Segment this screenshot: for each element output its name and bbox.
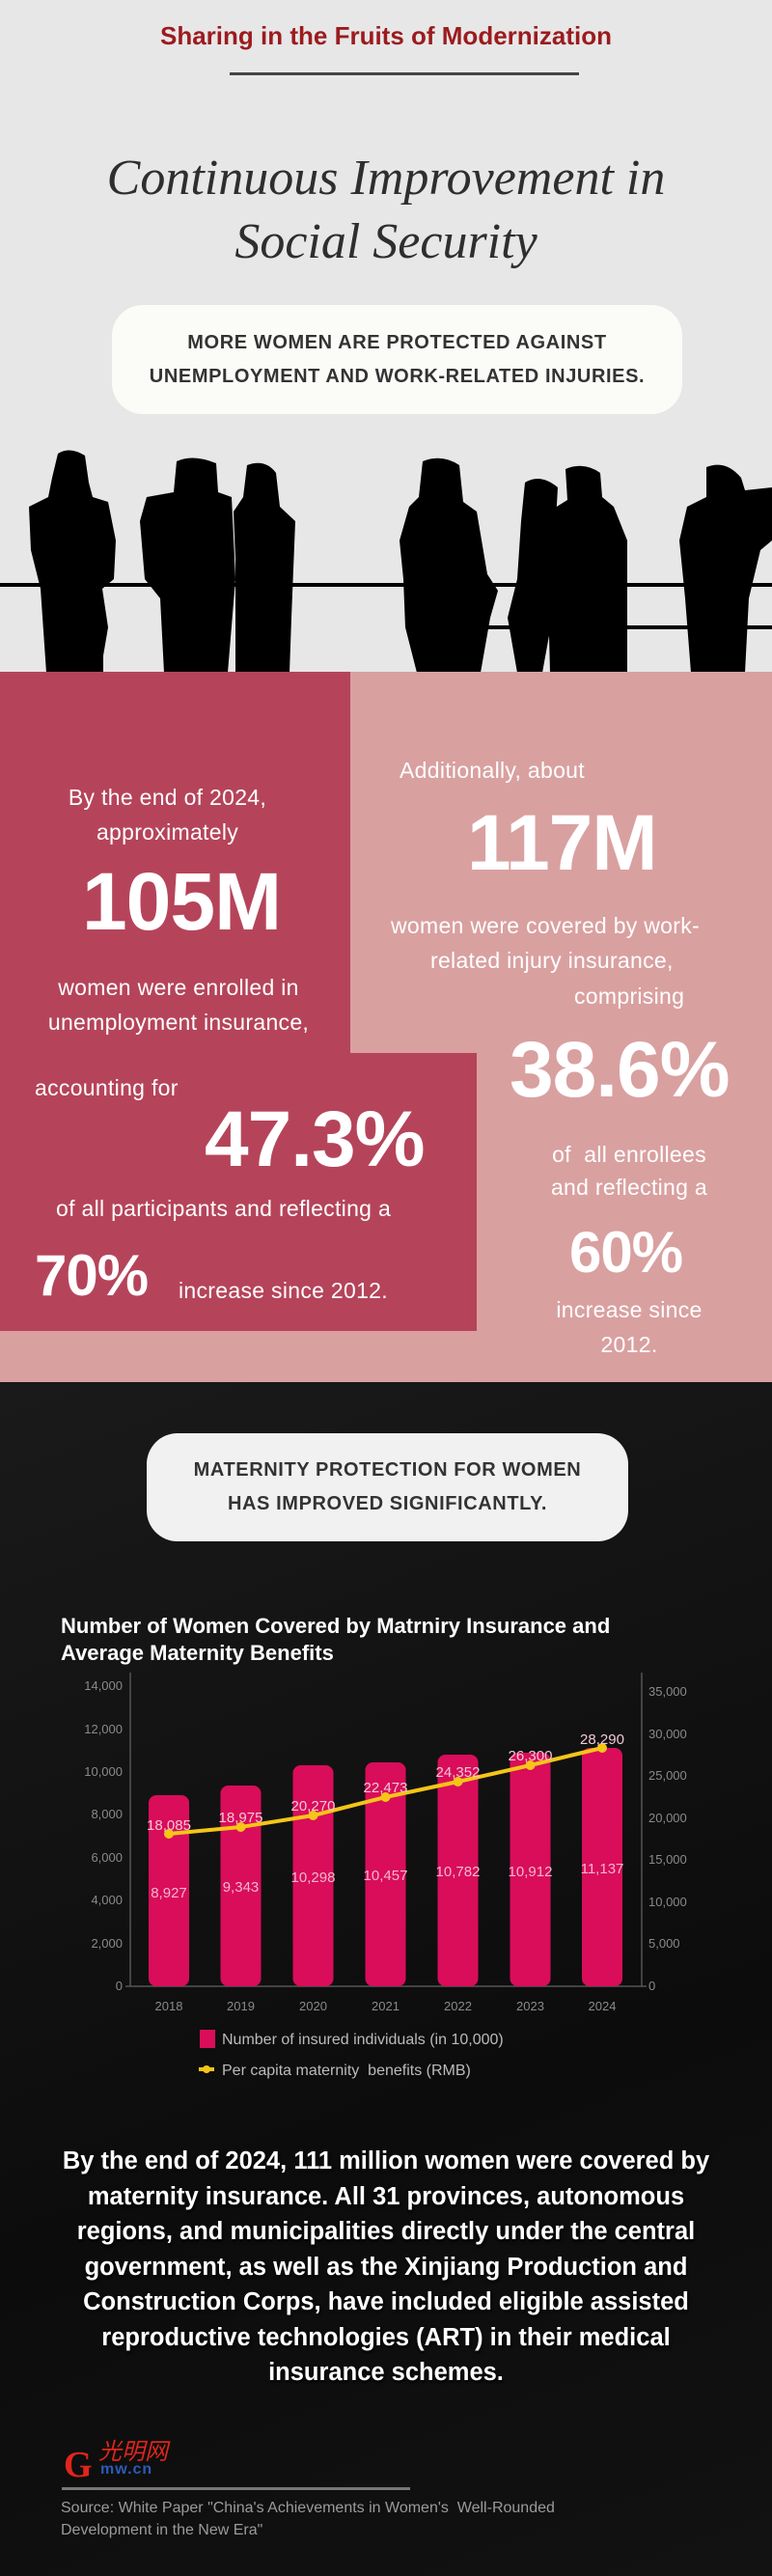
- panel: social insurance stats: 2012.: [600, 1332, 658, 1357]
- left axis: 12,000: [84, 1722, 123, 1736]
- x axis labels: 2022: [444, 1999, 472, 2013]
- panel: social insurance stats: increase since 2012.: [179, 1278, 388, 1303]
- right axis: 15,000: [648, 1852, 687, 1867]
- text: unemployment: By the end of 2024,: [69, 785, 266, 810]
- summary text: insurance schemes.: [268, 2359, 504, 2386]
- bar and line chart: [84, 1673, 687, 2079]
- main heading: Social Security: [234, 214, 538, 269]
- bar values: 10,298: [291, 1870, 335, 1886]
- chart title: Average Maternity Benefits: [61, 1641, 334, 1665]
- right axis: 10,000: [648, 1895, 687, 1909]
- text: work-related injury insurance: Additionally, about: [400, 758, 585, 783]
- line: per capita benefits: [169, 1748, 602, 1834]
- stat: 38.6%: 38.6%: [510, 1026, 730, 1114]
- x axis labels: 2020: [299, 1999, 327, 2013]
- line values: 18,975: [219, 1810, 262, 1826]
- panel: social insurance stats: unemployment insurance,: [48, 1010, 309, 1035]
- left axis: [84, 1678, 123, 1993]
- dark maternity section: [0, 1382, 772, 2576]
- stat: 70%: 70%: [35, 1243, 148, 1308]
- panel: social insurance stats: comprising: [574, 983, 684, 1009]
- summary text: regions, and municipalities directly under the central: [77, 2218, 695, 2245]
- text: unemployment: approximately: [96, 819, 238, 845]
- bar values: 10,782: [436, 1864, 480, 1880]
- line values: 18,085: [147, 1817, 191, 1834]
- line values: 20,270: [291, 1798, 335, 1814]
- panel: social insurance stats: related injury insurance,: [430, 948, 674, 973]
- right axis: 35,000: [648, 1684, 687, 1699]
- left axis: 6,000: [91, 1850, 123, 1865]
- legend: Per capita maternity benefits (RMB): [222, 2063, 471, 2079]
- bars: [149, 1748, 622, 1986]
- main heading: Continuous Improvement in: [107, 151, 665, 206]
- stat: 47.3%: 47.3%: [205, 1095, 425, 1183]
- left axis: 8,000: [91, 1807, 123, 1821]
- bar values: 11,137: [581, 1861, 623, 1877]
- summary text: reproductive technologies (ART) in their medical: [101, 2324, 671, 2351]
- line values: 22,473: [364, 1780, 407, 1796]
- logo: gmw.cn: [64, 2439, 171, 2485]
- right axis: 20,000: [648, 1811, 687, 1825]
- right axis: 30,000: [648, 1727, 687, 1741]
- x axis labels: [155, 1999, 616, 2013]
- chart title: [61, 1614, 610, 1665]
- silhouettes of people: [0, 450, 772, 672]
- left axis: 10,000: [84, 1764, 123, 1779]
- chart title: Number of Women Covered by Matrniry Insurance and: [61, 1614, 610, 1638]
- summary text: [63, 2147, 709, 2386]
- callout: maternity: MATERNITY PROTECTION FOR WOMEN: [194, 1459, 581, 1481]
- right axis: 25,000: [648, 1768, 687, 1783]
- right axis: 5,000: [648, 1936, 680, 1951]
- bar values: 10,457: [364, 1868, 407, 1884]
- x axis labels: 2024: [589, 1999, 616, 2013]
- source note: [61, 2500, 555, 2538]
- panel: social insurance stats: increase since: [556, 1297, 703, 1322]
- panel: social insurance stats: women were covered by work-: [391, 913, 700, 938]
- line values: 26,300: [509, 1748, 552, 1764]
- unemployment insurance block: [0, 672, 477, 1331]
- line values: 24,352: [436, 1764, 480, 1781]
- panel: social insurance stats: and reflecting a: [551, 1175, 707, 1200]
- legend: Number of insured individuals (in 10,000): [222, 2032, 504, 2048]
- main heading: [107, 151, 665, 269]
- panel: social insurance stats: [0, 672, 772, 1382]
- callout: unemployment: MORE WOMEN ARE PROTECTED AGAINST: [187, 332, 607, 353]
- x axis labels: 2023: [516, 1999, 544, 2013]
- panel: social insurance stats: women were enrolled in: [58, 975, 299, 1000]
- summary text: Construction Corps, have included eligible assisted: [83, 2288, 689, 2315]
- logo: gmw.cn: G: [64, 2445, 93, 2485]
- panel: social insurance stats: of all enrollees: [552, 1142, 706, 1167]
- legend: [199, 2030, 504, 2079]
- stat: 60%: 60%: [569, 1220, 682, 1285]
- panel: social insurance stats: accounting for: [35, 1075, 179, 1100]
- bar values: 9,343: [223, 1879, 259, 1896]
- left axis: 0: [116, 1979, 123, 1993]
- summary text: maternity insurance. All 31 provinces, autonomous: [88, 2183, 684, 2210]
- source note: Source: White Paper "China's Achievements in Women's Well-Rounded: [61, 2500, 555, 2516]
- text: unemployment: [69, 785, 266, 845]
- x axis labels: 2021: [372, 1999, 400, 2013]
- summary text: By the end of 2024, 111 million women were covered by: [63, 2147, 709, 2174]
- source note: Development in the New Era": [61, 2522, 262, 2538]
- bar values: 10,912: [509, 1864, 552, 1880]
- logo: gmw.cn: 光明网: [98, 2439, 168, 2465]
- left axis: 4,000: [91, 1893, 123, 1907]
- bar values: [151, 1861, 623, 1901]
- stat: 105M: 105M: [82, 856, 281, 947]
- header: series title: Sharing in the Fruits of Modernization: [160, 21, 612, 50]
- right axis: [648, 1684, 687, 1993]
- panel: social insurance stats: of all participants and reflecting a: [56, 1196, 391, 1221]
- x axis labels: 2019: [227, 1999, 255, 2013]
- left axis: 2,000: [91, 1936, 123, 1951]
- logo: gmw.cn: mw.cn: [100, 2461, 152, 2478]
- callout: unemployment: UNEMPLOYMENT AND WORK-RELATED INJURIES.: [150, 366, 645, 387]
- line values: [147, 1731, 624, 1834]
- right axis: 0: [648, 1979, 655, 1993]
- callout: unemployment: [112, 305, 682, 414]
- callout: maternity: [147, 1433, 628, 1541]
- summary text: government, as well as the Xinjiang Production and: [85, 2253, 687, 2280]
- stat: 117M: 117M: [467, 799, 657, 887]
- callout: maternity: HAS IMPROVED SIGNIFICANTLY.: [228, 1493, 547, 1514]
- line values: 28,290: [580, 1731, 624, 1748]
- x axis labels: 2018: [155, 1999, 182, 2013]
- bar values: 8,927: [151, 1885, 187, 1901]
- left axis: 14,000: [84, 1678, 123, 1693]
